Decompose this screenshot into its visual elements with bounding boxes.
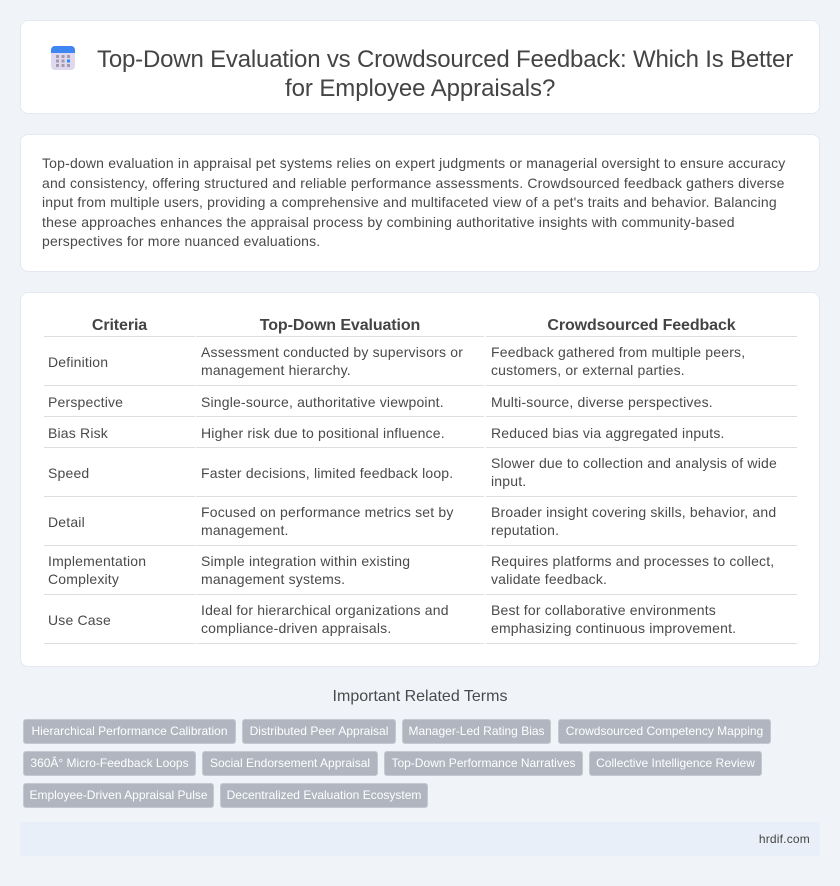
footer bar (20, 822, 820, 856)
footer source: hrdif.com (759, 832, 810, 846)
icon: calendar (51, 46, 75, 70)
row: definition: Definition (48, 354, 108, 370)
row: implementation complexity: management systems. (201, 571, 345, 587)
row: detail: Detail (48, 514, 85, 530)
row: perspective: Single-source, authoritative viewpoint. (201, 394, 444, 410)
intro text: and consistency, offering structured and reliable performance assessments. Crowdsourced feedback gathers diverse (42, 174, 785, 190)
row: definition: Feedback gathered from multiple peers, (491, 344, 745, 360)
row: implementation complexity: Simple integration within existing (201, 553, 410, 569)
tag (23, 783, 214, 808)
tag (384, 751, 583, 776)
row: speed: Speed (48, 465, 89, 481)
row: detail: Broader insight covering skills, behavior, and (491, 504, 776, 520)
intro text (42, 155, 786, 249)
tag (23, 719, 236, 744)
row: definition: management hierarchy. (201, 362, 351, 378)
title: for Employee Appraisals? (285, 75, 555, 102)
intro text: Top-down evaluation in appraisal pet systems relies on expert judgments or managerial oversight to ensure accuracy (42, 155, 785, 171)
row: bias risk: Higher risk due to positional influence. (201, 425, 445, 441)
row: definition (48, 344, 745, 378)
related terms heading: Important Related Terms (333, 688, 507, 705)
row: use case (48, 602, 736, 636)
row: perspective: Perspective (48, 394, 123, 410)
tag: Top-Down Performance Narratives (391, 756, 576, 770)
intro text: these approaches enhances the appraisal process by combining authoritative insights with community-based (42, 214, 735, 230)
row: use case: Best for collaborative environments (491, 602, 716, 618)
title: Top-Down Evaluation vs Crowdsourced Feedback: Which Is Better (97, 46, 793, 73)
row: detail: Focused on performance metrics set by (201, 504, 454, 520)
row: implementation complexity: Implementation (48, 553, 146, 569)
row: implementation complexity (48, 553, 774, 587)
row: perspective: Multi-source, diverse perspectives. (491, 394, 713, 410)
tag (402, 719, 551, 744)
row: definition: customers, or external parties. (491, 362, 685, 378)
tag (558, 719, 771, 744)
row: bias risk: Bias Risk (48, 425, 108, 441)
row: use case: Ideal for hierarchical organizations and (201, 602, 449, 618)
tag: Employee-Driven Appraisal Pulse (29, 788, 208, 802)
tag: Distributed Peer Appraisal (250, 724, 388, 738)
intro panel (20, 134, 820, 272)
row: speed: input. (491, 473, 526, 489)
tag: Decentralized Evaluation Ecosystem (227, 788, 421, 802)
row: perspective (48, 394, 713, 410)
row: bias risk: Reduced bias via aggregated inputs. (491, 425, 725, 441)
intro text: input from multiple users, providing a comprehensive and multifaceted view of a pet's traits and behavior. Balancing (42, 194, 777, 210)
tag: Manager-Led Rating Bias (408, 724, 545, 738)
title (97, 46, 793, 102)
header: top-down evaluation: Top-Down Evaluation (260, 317, 420, 334)
comparison table panel (20, 292, 820, 667)
row: speed (48, 455, 777, 489)
row: detail: reputation. (491, 522, 559, 538)
row: implementation complexity: Requires platforms and processes to collect, (491, 553, 774, 569)
row: implementation complexity: validate feedback. (491, 571, 607, 587)
intro text: perspectives for more nuanced evaluations. (42, 233, 320, 249)
tag (220, 783, 428, 808)
header: criteria: Criteria (92, 317, 147, 334)
row: use case: compliance-driven appraisals. (201, 620, 391, 636)
row: speed: Faster decisions, limited feedback loop. (201, 465, 453, 481)
tag (589, 751, 762, 776)
tag: Crowdsourced Competency Mapping (566, 724, 763, 738)
row: detail (48, 504, 776, 538)
row: definition: Assessment conducted by supervisors or (201, 344, 463, 360)
tag (23, 751, 196, 776)
related terms tags (23, 719, 771, 808)
tag: Hierarchical Performance Calibration (31, 724, 228, 738)
row: bias risk (48, 425, 725, 441)
title panel (20, 20, 820, 114)
row: speed: Slower due to collection and analysis of wide (491, 455, 777, 471)
row: use case: Use Case (48, 612, 111, 628)
tag: Social Endorsement Appraisal (210, 756, 370, 770)
row: detail: management. (201, 522, 289, 538)
tag (242, 719, 396, 744)
tag: Collective Intelligence Review (596, 756, 755, 770)
header: crowdsourced feedback: Crowdsourced Feedback (547, 317, 736, 334)
tag: 360Â° Micro-Feedback Loops (30, 756, 189, 770)
row: use case: emphasizing continuous improvement. (491, 620, 736, 636)
tag (202, 751, 378, 776)
row: implementation complexity: Complexity (48, 571, 119, 587)
